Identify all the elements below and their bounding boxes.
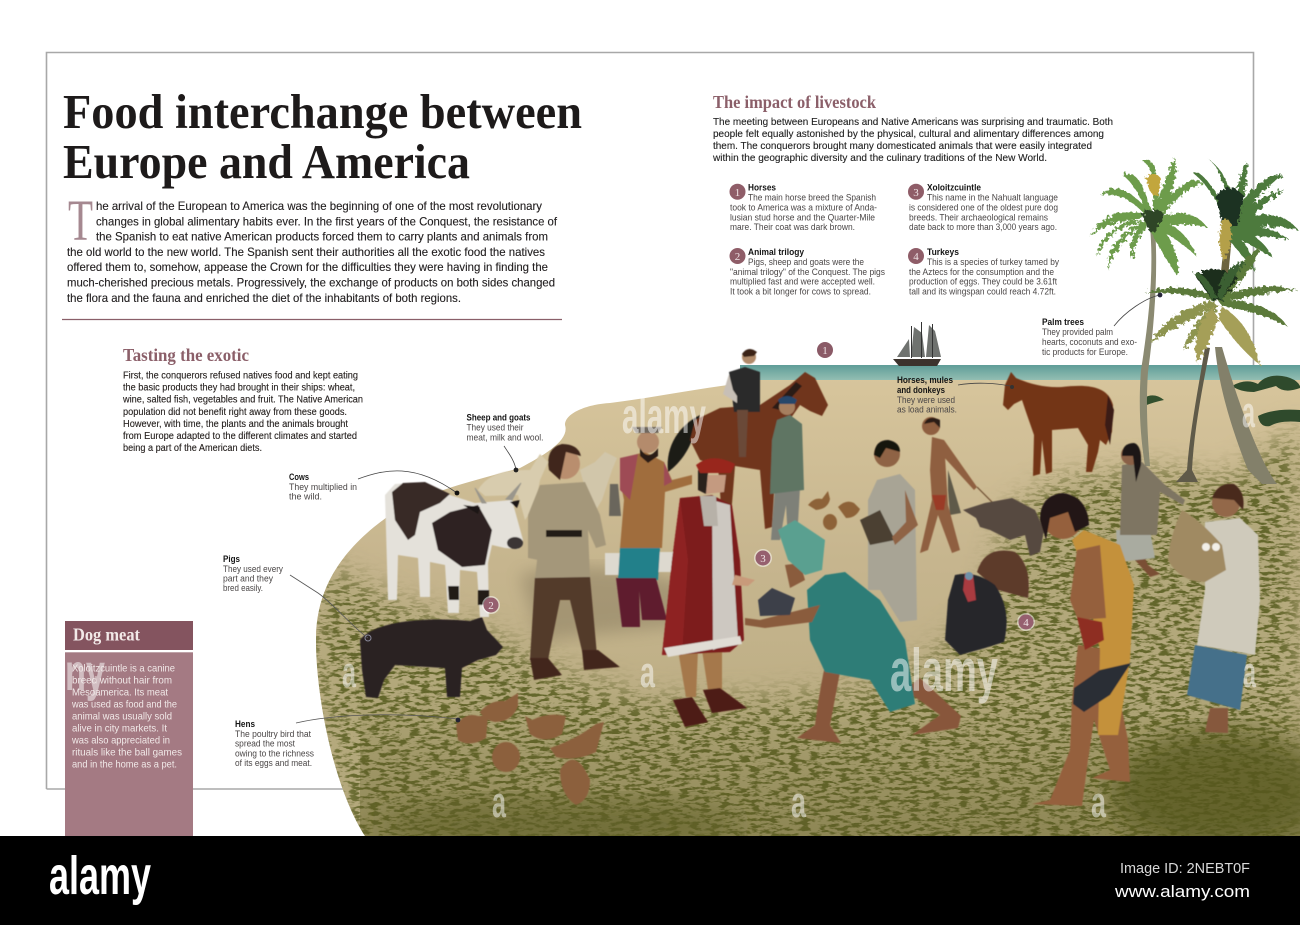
section: The impact of livestock: The meeting between Europeans and Native Americans was surprising and traumatic. Both bbox=[713, 117, 1113, 128]
item 4: Turkeys: tall and its wingspan could reach 4.72ft. bbox=[909, 286, 1056, 296]
section: The impact of livestock: them. The conquerors brought many domesticated animals that were easily integrated bbox=[713, 141, 1092, 152]
intro paragraph with drop cap: the Spanish to eat native American products forced them to carry plants and animals from bbox=[96, 231, 548, 244]
section: The impact of livestock: within the geographic diversity and the culinary traditions of the New World. bbox=[712, 153, 1047, 164]
sheep and goats bbox=[478, 452, 621, 520]
callout: horses, mules and donkeys: They were used bbox=[897, 395, 955, 405]
item 2: Animal trilogy: It took a bit longer for cows to spread. bbox=[730, 286, 871, 296]
callout: sheep and goats bbox=[466, 413, 544, 472]
panel: Dog meat: alive in city markets. It bbox=[72, 724, 167, 735]
title: Food interchange between bbox=[63, 84, 582, 139]
numbered marker 1 bbox=[817, 342, 833, 358]
Aztec noble with teal cape and xolo dog bbox=[745, 520, 961, 743]
callout: pigs: Pigs bbox=[223, 554, 240, 564]
callout: hens: of its eggs and meat. bbox=[235, 758, 312, 768]
callout: hens: The poultry bird that bbox=[235, 729, 312, 739]
item 4: Turkeys: the Aztecs for the consumption and the bbox=[909, 267, 1054, 277]
panel: Dog meat: ny bbox=[65, 644, 105, 702]
item 1: Horses: The main horse breed the Spanish bbox=[748, 193, 876, 203]
panel: Dog meat: Dog meat bbox=[73, 624, 140, 644]
footer bar: Image ID: 2NEBT0F bbox=[1120, 860, 1250, 877]
native walking with leash bbox=[920, 417, 995, 553]
callout: pigs: part and they bbox=[223, 574, 274, 584]
intro paragraph with drop cap: much-cherished precious metals. Progressively, the exchange of products on both sides changed bbox=[67, 276, 555, 290]
turkey bbox=[945, 551, 1029, 655]
section: Tasting the exotic: from Europe adapted to the different climates and started bbox=[123, 431, 357, 442]
palm trees bbox=[1090, 158, 1298, 484]
section: Tasting the exotic: population did not benefit right away from these goods. bbox=[123, 407, 347, 418]
page frame bbox=[46, 52, 1254, 789]
item 1: Horses: lusian stud horse and the Quarter-Mile bbox=[730, 212, 875, 222]
section: Tasting the exotic: the basic products they had brought in their ships: wheat, bbox=[123, 383, 355, 394]
section: The impact of livestock: people felt equally astonished by the physical, cultural and alimentary differences among bbox=[713, 129, 1104, 140]
section: Tasting the exotic: Tasting the exotic bbox=[123, 345, 249, 365]
callout: horses, mules and donkeys: and donkeys bbox=[897, 385, 945, 395]
man in red robe with beret bbox=[662, 458, 755, 727]
numbered marker 4: 4 bbox=[1023, 617, 1029, 629]
native with orange cape holding a bird bbox=[1032, 493, 1134, 806]
item 3: Xoloitzcuintle: breeds. Their archaeological remains bbox=[909, 212, 1049, 222]
watermarks: a bbox=[1242, 388, 1255, 437]
item 1: Horses: Horses bbox=[748, 183, 776, 193]
intro paragraph with drop cap: T bbox=[68, 188, 93, 253]
intro paragraph with drop cap bbox=[67, 188, 558, 305]
watermarks: a bbox=[640, 648, 655, 697]
callout: cows: Cows bbox=[289, 472, 309, 482]
item 4: Turkeys: This is a species of turkey tamed by bbox=[927, 257, 1060, 267]
item 3: Xoloitzcuintle: 3 bbox=[913, 187, 919, 199]
callout: horses, mules and donkeys: as load animals. bbox=[897, 404, 957, 414]
numbered marker 4 bbox=[1017, 613, 1035, 631]
callout: sheep and goats: meat, milk and wool. bbox=[466, 432, 544, 442]
callout: hens: spread the most bbox=[235, 739, 296, 749]
woman with braid bbox=[1116, 443, 1185, 577]
callout: palm trees: tic products for Europe. bbox=[1042, 347, 1128, 357]
callout: cows: They multiplied in bbox=[289, 482, 357, 492]
section: Tasting the exotic: being a part of the American diets. bbox=[123, 443, 262, 454]
panel: Dog meat: Xoloitzcuintle is a canine bbox=[72, 664, 175, 675]
item 1: Horses: took to America was a mixture of Anda- bbox=[730, 202, 877, 212]
callout: horses, mules and donkeys bbox=[897, 375, 1014, 414]
intro paragraph with drop cap: the old world to the new world. The Spanish sent their authorities all the exotic food the natives bbox=[67, 246, 545, 259]
callout: sheep and goats: They used their bbox=[466, 423, 524, 433]
callout: palm trees bbox=[1042, 293, 1162, 357]
hens bbox=[456, 693, 604, 805]
callout: cows: the wild. bbox=[289, 492, 322, 502]
callout: sheep and goats: Sheep and goats bbox=[466, 413, 531, 423]
numbered marker 2 bbox=[482, 596, 500, 614]
panel: Dog meat: rituals like the ball games bbox=[72, 748, 182, 759]
callout: pigs: bred easily. bbox=[223, 583, 263, 593]
item 3: Xoloitzcuintle: is considered one of the oldest pure dog bbox=[909, 202, 1058, 212]
watermarks bbox=[342, 388, 1256, 827]
panel: Dog meat: was also appreciated in bbox=[71, 736, 170, 747]
watermarks: a bbox=[492, 778, 506, 827]
section: The impact of livestock: The impact of livestock bbox=[713, 92, 876, 112]
scene: beach and grass ground bbox=[300, 365, 1300, 853]
item 3: Xoloitzcuintle: date back to more than 3,000 years ago. bbox=[909, 222, 1057, 232]
title bbox=[63, 84, 582, 189]
watermarks: a bbox=[1243, 648, 1256, 697]
watermarks: a bbox=[342, 648, 356, 697]
callout: cows bbox=[289, 471, 459, 502]
man with leather apron bbox=[605, 427, 692, 627]
numbered marker 2: 2 bbox=[488, 600, 494, 612]
item 2: Animal trilogy: "animal trilogy" of the Conquest. The pigs bbox=[730, 267, 886, 277]
section: The impact of livestock bbox=[712, 92, 1113, 164]
item 2: Animal trilogy bbox=[730, 247, 886, 296]
callout: hens bbox=[235, 715, 460, 768]
left horse with rider bbox=[668, 349, 828, 529]
small birds on the sand bbox=[808, 491, 860, 530]
scene figures and animals bbox=[360, 349, 1260, 806]
intro paragraph with drop cap: the flora and the fauna and enriched the diet of the inhabitants of both regions. bbox=[67, 292, 461, 305]
item 1: Horses: 1 bbox=[735, 187, 740, 199]
icon: sailing ship bbox=[893, 322, 941, 366]
callout: pigs bbox=[223, 554, 371, 641]
item 3: Xoloitzcuintle: Xoloitzcuintle bbox=[927, 183, 981, 193]
callout: palm trees: hearts, coconuts and exo- bbox=[1042, 337, 1137, 347]
intro paragraph with drop cap: offered them to, somehow, appease the Crown for the difficulties they were having in finding the bbox=[67, 261, 548, 274]
panel: Dog meat: breed without hair from bbox=[72, 676, 172, 687]
watermarks: alamy bbox=[622, 388, 706, 444]
man with beige tunic bbox=[528, 444, 620, 680]
callout: horses, mules and donkeys: Horses, mules bbox=[897, 375, 953, 385]
section: Tasting the exotic: First, the conquerors refused natives food and kept eating bbox=[123, 370, 358, 382]
callout: pigs: They used every bbox=[223, 564, 284, 574]
item 1: Horses bbox=[730, 183, 877, 232]
panel: Dog meat: animal was usually sold bbox=[72, 712, 172, 723]
man in grey dress bbox=[860, 440, 918, 622]
callout: hens: Hens bbox=[235, 719, 255, 729]
watermarks: a bbox=[1091, 778, 1106, 827]
man in green tunic bbox=[770, 396, 804, 540]
callout: palm trees: Palm trees bbox=[1042, 317, 1084, 327]
numbered marker 1: 1 bbox=[822, 345, 828, 357]
intro paragraph with drop cap: he arrival of the European to America was the beginning of one of the most revolutionary bbox=[96, 200, 542, 213]
panel: Dog meat bbox=[65, 621, 193, 836]
item 2: Animal trilogy: Animal trilogy bbox=[748, 247, 804, 257]
item 1: Horses: mare. Their coat was dark brown. bbox=[730, 222, 855, 232]
item 4: Turkeys: production of eggs. They could be 3.61ft bbox=[909, 277, 1058, 287]
cow bbox=[385, 482, 523, 617]
numbered marker 3 bbox=[754, 549, 772, 567]
section: Tasting the exotic: wine, salted fish, vegetables and fruit. The Native American bbox=[122, 395, 363, 406]
woman carrying basket of eggs bbox=[1168, 484, 1260, 733]
item 3: Xoloitzcuintle: This name in the Nahualt language bbox=[927, 193, 1058, 203]
item 4: Turkeys bbox=[908, 247, 1060, 296]
footer bar: www.alamy.com bbox=[1114, 882, 1250, 901]
panel: Dog meat: Mesoamerica. Its meat bbox=[72, 688, 168, 699]
pig bbox=[360, 617, 503, 698]
section: Tasting the exotic: However, with time, the plants and the animals brought bbox=[123, 419, 348, 430]
footer bar bbox=[0, 836, 1300, 925]
watermarks: a bbox=[791, 778, 806, 827]
title: Europe and America bbox=[63, 134, 470, 189]
panel: Dog meat: was used as food and the bbox=[71, 700, 177, 711]
item 2: Animal trilogy: multiplied fast and were accepted well. bbox=[730, 277, 875, 287]
panel: Dog meat: and in the home as a pet. bbox=[72, 760, 177, 771]
dog being led bbox=[963, 498, 1044, 556]
section: Tasting the exotic bbox=[122, 345, 363, 454]
callout: hens: owing to the richness bbox=[235, 748, 315, 758]
item 2: Animal trilogy: 2 bbox=[735, 251, 740, 263]
numbered marker 3: 3 bbox=[760, 553, 766, 565]
item 4: Turkeys: Turkeys bbox=[927, 247, 959, 257]
callout: palm trees: They provided palm bbox=[1042, 327, 1113, 337]
right horse bbox=[1003, 372, 1114, 476]
item 2: Animal trilogy: Pigs, sheep and goats were the bbox=[748, 257, 864, 267]
intro paragraph with drop cap: changes in global alimentary habits ever. In the first years of the Conquest, the resistance of bbox=[96, 215, 558, 228]
footer bar: alamy bbox=[49, 846, 151, 906]
watermarks: alamy bbox=[890, 637, 998, 704]
item 4: Turkeys: 4 bbox=[913, 251, 919, 263]
item 3: Xoloitzcuintle bbox=[908, 183, 1058, 232]
